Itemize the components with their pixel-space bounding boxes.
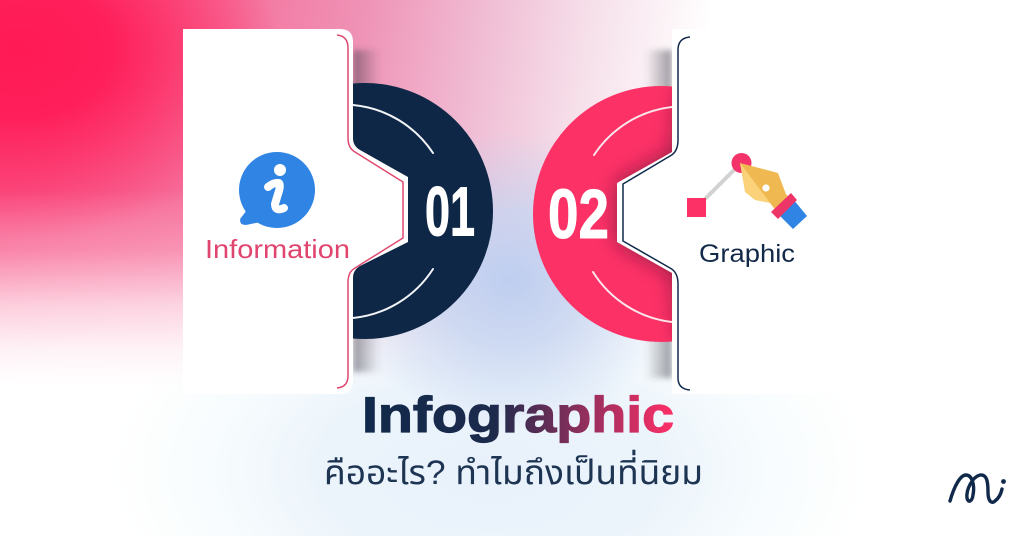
number 02: 02 xyxy=(548,175,609,253)
icon: brand logo xyxy=(950,475,1006,502)
icon: pen tool xyxy=(687,153,807,229)
number 01: 01 xyxy=(425,172,475,250)
background: pink gradient xyxy=(0,0,684,362)
panel: graphic card xyxy=(617,29,1000,394)
shadow behind right card xyxy=(645,50,672,378)
label: Information: Information xyxy=(205,234,350,264)
icon: information speech bubble xyxy=(239,152,315,228)
subtitle: คืออะไร? ทำไมถึงเป็นที่นิยม xyxy=(324,449,703,492)
circle 01 xyxy=(353,83,493,339)
main artwork xyxy=(183,29,1006,504)
shadow behind left card xyxy=(353,50,380,372)
label: Graphic: Graphic xyxy=(699,240,795,268)
panel: information card xyxy=(183,29,408,394)
circle 02 xyxy=(533,86,672,342)
title: Infographic xyxy=(362,387,674,443)
